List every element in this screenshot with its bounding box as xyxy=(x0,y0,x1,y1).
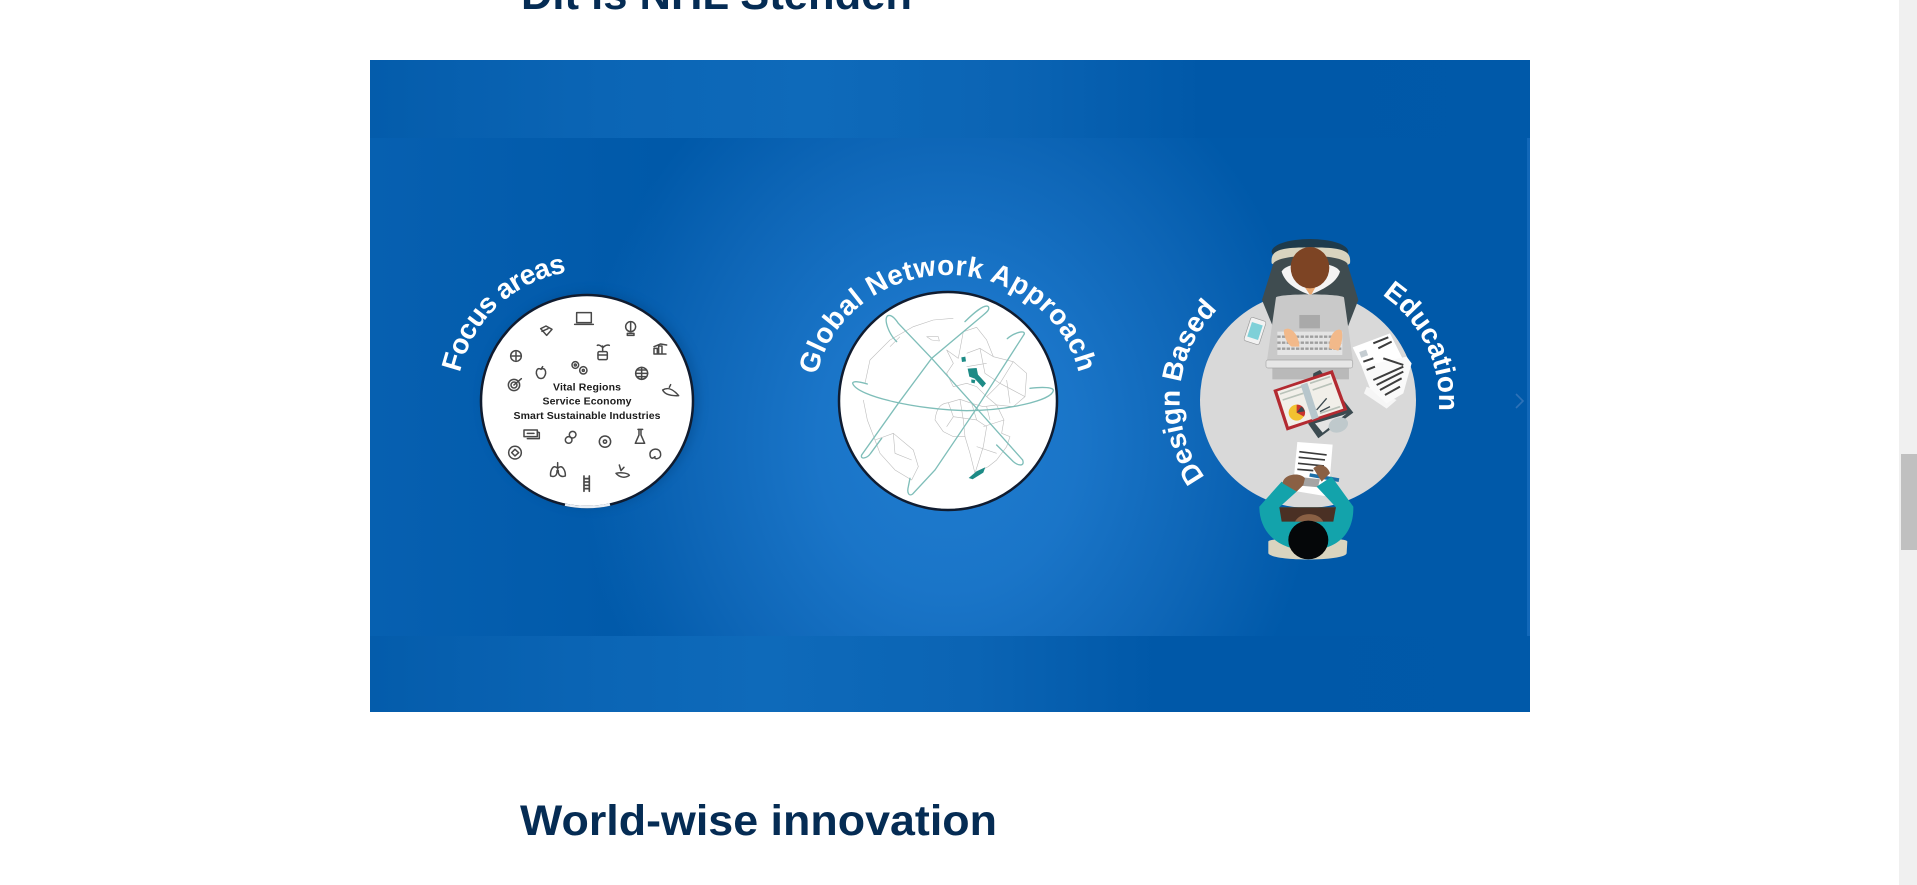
icon: disc xyxy=(599,436,611,447)
heading: World-wise innovation: World-wise innovation xyxy=(520,797,997,845)
icon: coins xyxy=(565,431,576,443)
focus areas icon ring xyxy=(508,313,679,491)
table disc xyxy=(1200,292,1416,508)
design based curved title: Design Based xyxy=(1162,297,1216,486)
icon: laptop xyxy=(575,313,593,324)
panel: global network approach xyxy=(800,256,1095,512)
education curved title: Education xyxy=(1384,280,1456,410)
icon: dna strip xyxy=(584,476,589,491)
map: country outlines xyxy=(863,318,1027,480)
focus areas shadow and disc xyxy=(481,292,699,508)
panel: blue banner xyxy=(370,60,1530,712)
icon: handshake xyxy=(541,326,552,335)
icon: globe xyxy=(636,367,648,379)
icon: flask xyxy=(635,429,645,443)
globe disc xyxy=(839,292,1057,510)
icon: bar chart xyxy=(654,344,667,354)
icon: apple xyxy=(536,367,546,378)
global network curved title: Global Network Approach xyxy=(800,256,1095,372)
person at bottom with notebook xyxy=(1259,442,1353,560)
world map and orbits xyxy=(853,306,1053,495)
person at top with chair and laptop xyxy=(1262,239,1358,379)
browser scrollbar xyxy=(1899,0,1917,885)
icon: brain xyxy=(650,449,661,459)
icon: banknotes xyxy=(524,430,539,439)
icon: target xyxy=(508,379,521,391)
orbits xyxy=(853,306,1053,495)
documents stack xyxy=(1353,333,1412,409)
open binder with pie chart xyxy=(1273,370,1347,431)
panel: focus areas xyxy=(442,259,700,508)
focus areas centre text: Service Economy xyxy=(542,396,632,408)
icon: lungs xyxy=(551,463,565,476)
map: highlighted regions xyxy=(961,357,986,479)
icon: sprout pot xyxy=(597,345,609,360)
focus areas centre text: Smart Sustainable Industries xyxy=(514,410,661,422)
focus areas centre text: Vital Regions xyxy=(553,382,621,394)
icon: ball xyxy=(509,446,521,459)
icon: compass xyxy=(511,351,521,361)
panel: design based education xyxy=(1162,239,1456,560)
illustration: meeting scene xyxy=(1244,239,1412,560)
icon: gears xyxy=(572,362,587,374)
focus areas centre text xyxy=(514,382,661,422)
icon: phone xyxy=(1244,317,1266,345)
icon: hand with plant xyxy=(616,465,629,477)
focus areas curved title: Focus areas xyxy=(442,259,564,371)
clipboard xyxy=(1308,370,1353,438)
icon: globe on stand xyxy=(626,322,636,335)
icon: whale xyxy=(663,385,679,396)
arrow: carousel next xyxy=(1516,394,1523,408)
